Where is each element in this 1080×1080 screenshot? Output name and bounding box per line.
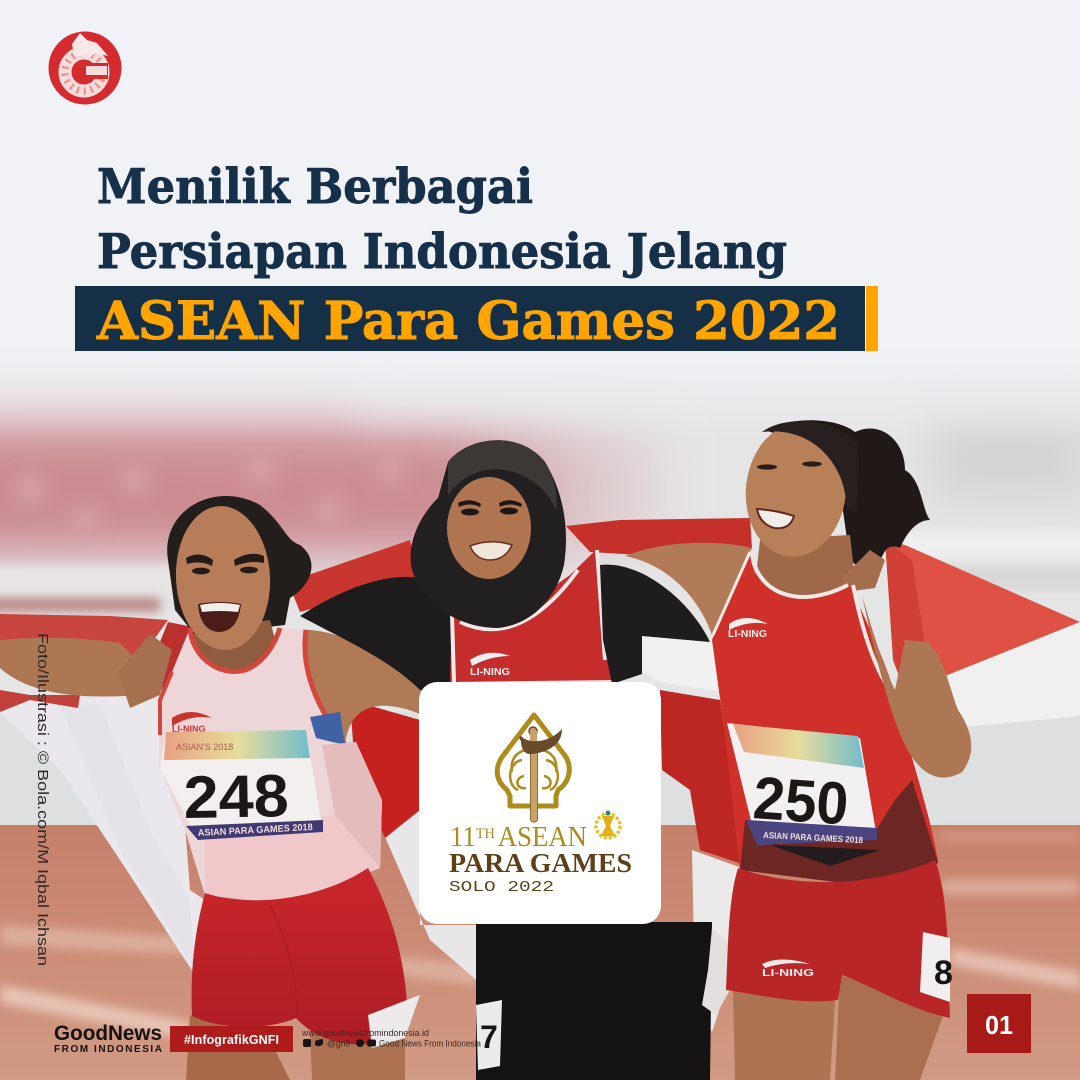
singlet logo: [470, 653, 510, 678]
hand on shoulder: [118, 634, 172, 708]
APSF emblem: [596, 810, 620, 838]
black sleeve right: [600, 565, 710, 684]
title line 3: ASEAN Para Games 2022: [96, 291, 840, 352]
shorts: [192, 868, 408, 1044]
hairline: [762, 421, 859, 512]
hashtag tag: #InfografikGNFI: [184, 1033, 279, 1047]
bib 250: ASIAN PARA GAMES 2018: [763, 830, 863, 845]
legs: [186, 1015, 290, 1080]
GoodNews wordmark: GoodNews: [54, 1022, 162, 1045]
athlete: right, bib 250: [625, 418, 971, 1080]
photo: flags: [0, 518, 1080, 1032]
singlet logo: LI-NING: [728, 629, 767, 640]
black pants: [476, 922, 712, 1080]
singlet logo: [172, 712, 212, 734]
outstretched arm: [0, 638, 165, 696]
shorts logo: [762, 960, 814, 979]
singlet logo: LI-NING: [172, 724, 206, 734]
mouth: [198, 602, 241, 632]
arm behind: [625, 543, 752, 635]
neck: [190, 620, 280, 690]
title line 2: Persiapan Indonesia Jelang: [97, 224, 787, 280]
shorts logo: LI-NING: [762, 968, 814, 979]
logo line 1: ASEAN: [498, 822, 587, 853]
bib 248: [160, 730, 323, 840]
hashtag tag: [170, 1026, 293, 1052]
legs: [733, 990, 835, 1080]
arm and hand: [862, 595, 971, 778]
logo line 1: TH: [476, 826, 495, 842]
flag: red right: [885, 540, 1080, 692]
athlete: left, bib 248: [0, 496, 432, 1080]
eyes: [757, 461, 822, 470]
footer brand: [54, 1022, 162, 1055]
bib 248: ASIAN PARA GAMES 2018: [198, 822, 313, 839]
highlighted title: [75, 286, 878, 352]
social handle: @gnfi: [327, 1038, 350, 1048]
top fade panel: [0, 0, 1080, 440]
title accent: [866, 286, 878, 351]
singlet logo: LI-NING: [470, 667, 510, 678]
logo line 3: SOLO 2022: [449, 879, 554, 896]
social icons: [303, 1039, 376, 1047]
logo line 1: 11: [450, 822, 477, 853]
logo line 2: PARA GAMES: [449, 848, 632, 878]
page number: 01: [985, 1010, 1013, 1040]
card: [419, 682, 661, 924]
singlet logo: [728, 618, 768, 640]
flag: red left strip: [0, 614, 168, 668]
ponytail: [765, 420, 930, 575]
black sleeve left: [300, 577, 470, 690]
bib 248: 248: [183, 762, 289, 831]
website: www.goodnewsfromindonesia.id: [301, 1028, 429, 1038]
gunungan icon: [497, 715, 569, 806]
mouth: [470, 542, 512, 560]
title line 1: Menilik Berbagai: [97, 159, 533, 215]
athlete: middle, hijab: [300, 440, 732, 1080]
footer contact: [301, 1028, 481, 1048]
shorts tag: [920, 932, 953, 1002]
page name: Good News From Indonesia: [379, 1038, 481, 1048]
logo card: 11th ASEAN Para Games: [419, 682, 661, 924]
shorts tag: 8: [934, 954, 953, 992]
hair back: [167, 496, 311, 635]
face: [447, 477, 531, 579]
brows and eyes: [186, 554, 264, 574]
lower singlet shading: [205, 800, 382, 905]
hip tag: [702, 928, 732, 1015]
logo: red G emblem: [48, 32, 122, 104]
hijab: [411, 440, 566, 628]
wordmark subtitle: FROM INDONESIA: [54, 1044, 162, 1055]
bib 250: [727, 723, 877, 845]
shorts number tag: [368, 995, 420, 1048]
singlet: [450, 548, 615, 682]
face: [172, 504, 274, 652]
title: [97, 159, 787, 280]
singlet: [159, 628, 382, 905]
bib 250: 250: [751, 764, 851, 838]
flag: white right: [905, 622, 1080, 728]
mouth: [757, 509, 794, 528]
title bar: [75, 286, 865, 351]
face: [739, 418, 853, 562]
flag: white left: [0, 695, 205, 975]
leg number tag: 7: [480, 1019, 498, 1055]
leg number tag: [476, 1000, 502, 1070]
flag: red behind: [288, 540, 420, 612]
right arm: [295, 630, 432, 745]
neck: [755, 535, 855, 605]
hand on shoulder: [842, 550, 885, 592]
page number: [967, 994, 1031, 1053]
photo credit: Foto/Ilustrasi : © Bola.com/M Iqbal Ichsan: [34, 633, 50, 966]
shorts: [726, 860, 950, 1018]
lower singlet: [740, 780, 938, 885]
keris icon: [519, 727, 562, 822]
singlet: [712, 552, 938, 885]
eyes: [458, 500, 522, 516]
bib 248: ASIAN'S 2018: [176, 742, 233, 752]
